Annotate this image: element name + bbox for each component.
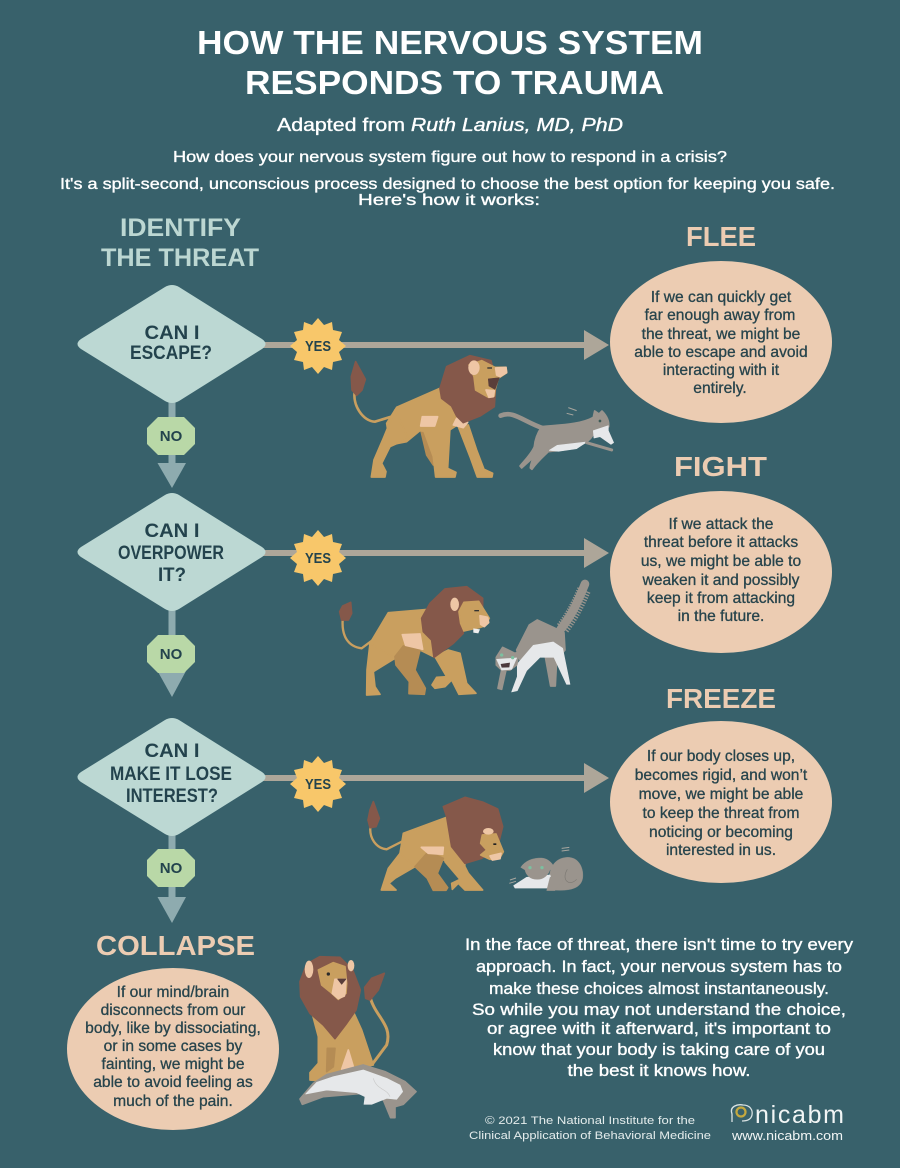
heading: identify the threat: IDENTIFY xyxy=(120,214,241,242)
panel: freeze: interested in us. xyxy=(666,842,776,859)
title xyxy=(197,24,703,101)
decision: can I make it lose interest xyxy=(78,718,266,836)
decision: can I make it lose interest: MAKE IT LOSE xyxy=(110,764,232,785)
intro text: Here's how it works: xyxy=(358,192,540,209)
badge: no 2 xyxy=(147,635,195,673)
panel: fight: weaken it and possibly xyxy=(642,572,800,589)
closing paragraph: In the face of threat, there isn't time to try every xyxy=(465,935,854,954)
intro text xyxy=(60,149,835,209)
badge: yes 3 xyxy=(290,756,346,812)
decision: can I make it lose interest: CAN I xyxy=(144,741,200,762)
decision: can I escape: ESCAPE? xyxy=(130,343,212,364)
panel: collapse: body, like by dissociating, xyxy=(85,1020,261,1037)
logo: nicabm: www.nicabm.com xyxy=(731,1128,843,1143)
panel: flee: able to escape and avoid xyxy=(634,344,808,361)
intro text: It's a split-second, unconscious process designed to choose the best option for keeping you safe. xyxy=(60,176,835,193)
decision: can I overpower it: CAN I xyxy=(144,521,200,542)
closing paragraph: or agree with it afterward, it's important to xyxy=(487,1019,831,1038)
panel: freeze: noticing or becoming xyxy=(649,824,793,841)
closing paragraph: So while you may not understand the choice, xyxy=(472,1000,846,1019)
panel: freeze: move, we might be able xyxy=(639,786,803,803)
vertical connectors and down arrows xyxy=(158,400,186,923)
closing paragraph: make these choices almost instantaneously. xyxy=(489,979,829,998)
badge: no 2: NO xyxy=(160,646,183,663)
panel: flee: FLEE xyxy=(686,221,756,252)
closing paragraph: the best it knows how. xyxy=(568,1061,750,1080)
illustration: lion sniffing frozen cat xyxy=(368,797,583,891)
panel: freeze: becomes rigid, and won’t xyxy=(635,767,808,784)
panel: freeze: FREEZE xyxy=(666,683,776,714)
closing paragraph: know that your body is taking care of you xyxy=(493,1040,825,1059)
panel: fight: keep it from attacking xyxy=(647,590,795,607)
title: HOW THE NERVOUS SYSTEM xyxy=(197,24,703,61)
title: RESPONDS TO TRAUMA xyxy=(245,64,664,101)
illustration: lion standing over collapsed cat xyxy=(300,957,416,1118)
illustration: lion facing arched cat xyxy=(340,584,585,695)
panel: fight xyxy=(610,451,832,653)
panel: collapse xyxy=(67,930,279,1130)
panel: flee xyxy=(610,221,832,423)
panel: flee: If we can quickly get xyxy=(651,289,792,306)
heading: identify the threat xyxy=(101,214,259,272)
decision: can I overpower it: IT? xyxy=(158,565,186,586)
badge: no 3: NO xyxy=(160,860,183,877)
closing paragraph xyxy=(465,935,854,1080)
closing paragraph: approach. In fact, your nervous system has to xyxy=(476,957,842,976)
panel: flee: entirely. xyxy=(693,380,747,397)
logo: nicabm: nicabm xyxy=(755,1101,844,1129)
decision: can I overpower it xyxy=(78,493,266,611)
illustration: lion chasing fleeing cat xyxy=(351,356,614,477)
panel: freeze: to keep the threat from xyxy=(643,805,799,822)
intro text: How does your nervous system figure out how to respond in a crisis? xyxy=(173,149,727,166)
panel: flee: interacting with it xyxy=(663,362,780,379)
panel: collapse: able to avoid feeling as xyxy=(93,1074,253,1091)
panel: fight: FIGHT xyxy=(674,451,767,482)
panel: collapse: COLLAPSE xyxy=(96,930,255,961)
decision: can I make it lose interest: INTEREST? xyxy=(126,786,218,807)
decision: can I overpower it: OVERPOWER xyxy=(118,543,224,564)
panel: collapse: much of the pain. xyxy=(113,1093,233,1110)
copyright: Clinical Application of Behavioral Medicine xyxy=(469,1130,711,1142)
logo: nicabm xyxy=(731,1101,844,1143)
panel: fight: us, we might be able to xyxy=(641,553,802,570)
badge: yes 2 xyxy=(290,530,346,586)
copyright xyxy=(469,1115,711,1142)
heading: identify the threat: THE THREAT xyxy=(101,244,259,272)
subtitle: adapted from: Adapted from Ruth Lanius, MD, PhD xyxy=(277,114,623,135)
badge: yes 2: YES xyxy=(305,550,331,567)
panel: flee: far enough away from xyxy=(645,307,795,324)
decision: can I escape: CAN I xyxy=(144,323,200,344)
panel: fight: If we attack the xyxy=(669,516,773,533)
panel: collapse: fainting, we might be xyxy=(101,1056,245,1073)
horizontal yes arrows xyxy=(262,330,609,793)
panel: collapse: or in some cases by xyxy=(104,1038,243,1055)
badge: yes 1: YES xyxy=(305,338,331,355)
panel: collapse: disconnects from our xyxy=(101,1002,245,1019)
badge: no 1: NO xyxy=(160,428,183,445)
panel: freeze xyxy=(610,683,832,883)
badge: yes 1 xyxy=(290,318,346,374)
badge: no 1 xyxy=(147,417,195,455)
panel: fight: in the future. xyxy=(678,608,764,625)
decision: can I escape xyxy=(78,285,266,403)
badge: no 3 xyxy=(147,849,195,887)
panel: collapse: If our mind/brain xyxy=(117,984,229,1001)
badge: yes 3: YES xyxy=(305,776,331,793)
panel: fight: threat before it attacks xyxy=(644,534,798,551)
panel: freeze: If our body closes up, xyxy=(647,748,795,765)
copyright: © 2021 The National Institute for the xyxy=(485,1115,695,1127)
panel: flee: the threat, we might be xyxy=(642,326,800,343)
